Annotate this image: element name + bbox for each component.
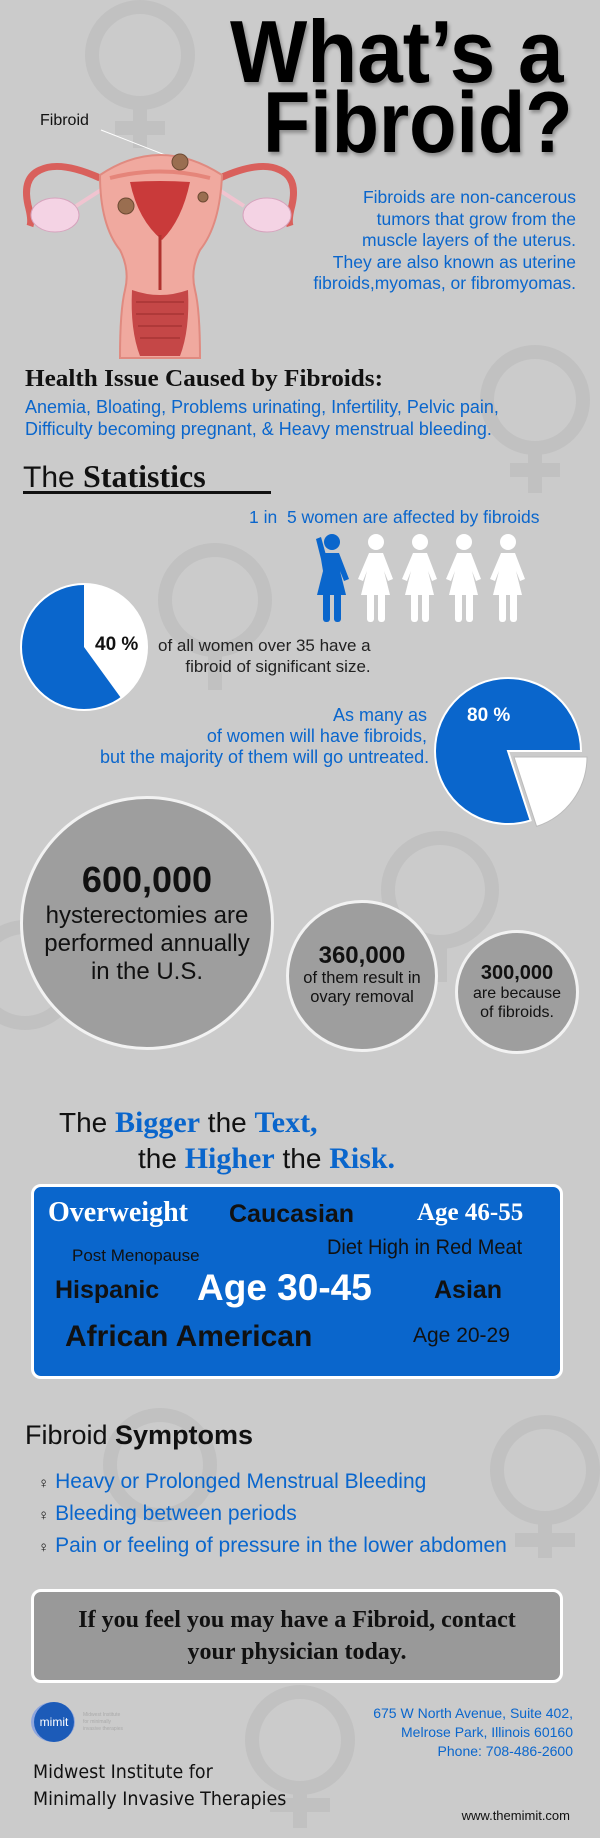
80% label: 80 % (467, 705, 510, 726)
risk heading: the Higher the Risk. (138, 1142, 395, 1175)
circle: 600,000: hysterectomies are (46, 902, 248, 929)
contact callout (31, 1589, 563, 1683)
circle: 300,000 (455, 930, 579, 1054)
logo: Midwest Institute (83, 1712, 120, 1718)
40% text (158, 636, 371, 676)
risk factor box: Asian (434, 1276, 502, 1304)
circle: 600,000: performed annually (44, 930, 250, 957)
definition paragraph: muscle layers of the uterus. (362, 230, 576, 250)
circle: 600,000: in the U.S. (91, 958, 203, 985)
icon: women figures (316, 534, 525, 622)
circle: 360,000 (286, 900, 438, 1052)
logo: mimit (40, 1715, 68, 1729)
80% text: but the majority of them will go untreated. (100, 747, 429, 767)
risk heading (59, 1106, 395, 1175)
40% text: of all women over 35 have a (158, 636, 371, 655)
risk factor box: Age 30-45 (197, 1267, 372, 1308)
risk factor box: Caucasian (229, 1200, 354, 1228)
80% text (100, 705, 429, 767)
pie chart 40% (20, 583, 148, 711)
1 in 5 stat: 1 in 5 women are affected by fibroids (249, 507, 540, 527)
risk heading: The Bigger the Text, (59, 1106, 318, 1139)
risk factor box: Hispanic (55, 1276, 159, 1304)
risk factor box: Post Menopause (72, 1246, 200, 1265)
contact callout: If you feel you may have a Fibroid, contact (78, 1607, 516, 1633)
40% text: fibroid of significant size. (185, 657, 371, 676)
health issues list: Difficulty becoming pregnant, & Heavy menstrual bleeding. (25, 419, 492, 439)
symptoms heading: Fibroid Symptoms (25, 1420, 253, 1450)
symptoms list: ♀ Bleeding between periods (38, 1502, 297, 1525)
logo: for minimally (83, 1719, 111, 1725)
symptoms list: ♀ Heavy or Prolonged Menstrual Bleeding (38, 1470, 426, 1493)
symptoms list (38, 1470, 507, 1557)
circle: 360,000: 360,000 (319, 942, 405, 969)
circle: 300,000: 300,000 (481, 962, 553, 984)
organization name: Minimally Invasive Therapies (33, 1788, 286, 1810)
organization name (33, 1761, 286, 1810)
logo: invasive therapies (83, 1726, 123, 1732)
contact callout: your physician today. (188, 1639, 406, 1665)
health issues heading: Health Issue Caused by Fibroids: (25, 366, 383, 392)
40% label: 40 % (95, 634, 138, 655)
organization name: Midwest Institute for (33, 1761, 213, 1783)
logo (31, 1702, 123, 1742)
risk factor box: Overweight (48, 1197, 188, 1228)
risk factor box: African American (65, 1320, 312, 1353)
definition paragraph: Fibroids are non-cancerous (363, 187, 576, 207)
title: Fibroid? (263, 75, 573, 171)
title: What’s a (230, 2, 563, 101)
80% text: of women will have fibroids, (207, 726, 427, 746)
fibroid label: Fibroid (40, 112, 89, 129)
circle: 600,000 (20, 796, 274, 1050)
definition paragraph (313, 187, 576, 293)
symptoms list: ♀ Pain or feeling of pressure in the lower abdomen (38, 1534, 507, 1557)
health issues list: Anemia, Bloating, Problems urinating, Infertility, Pelvic pain, (25, 397, 499, 417)
circle: 360,000: of them result in (303, 969, 421, 987)
statistics heading: The Statistics (23, 458, 206, 494)
circle: 300,000: of fibroids. (480, 1004, 554, 1021)
definition paragraph: fibroids,myomas, or fibromyomas. (313, 273, 576, 293)
address: 675 W North Avenue, Suite 402, (373, 1705, 573, 1721)
risk factor box: Age 20-29 (413, 1324, 510, 1347)
address (373, 1705, 573, 1759)
circle: 300,000: are because (473, 985, 561, 1002)
website: www.themimit.com (462, 1808, 570, 1823)
circle: 600,000: 600,000 (82, 859, 212, 900)
definition paragraph: tumors that grow from the (377, 208, 576, 228)
risk factor box (31, 1184, 563, 1379)
circle: 360,000: ovary removal (310, 988, 414, 1006)
risk factor box: Diet High in Red Meat (327, 1236, 522, 1259)
pie chart 80% (434, 677, 588, 827)
80% text: As many as (333, 705, 427, 725)
title (230, 2, 573, 171)
address: Phone: 708-486-2600 (438, 1743, 573, 1759)
address: Melrose Park, Illinois 60160 (401, 1724, 573, 1740)
uterus illustration (23, 130, 297, 359)
health issues list (25, 397, 499, 439)
definition paragraph: They are also known as uterine (333, 252, 576, 272)
risk factor box: Age 46-55 (417, 1199, 523, 1226)
